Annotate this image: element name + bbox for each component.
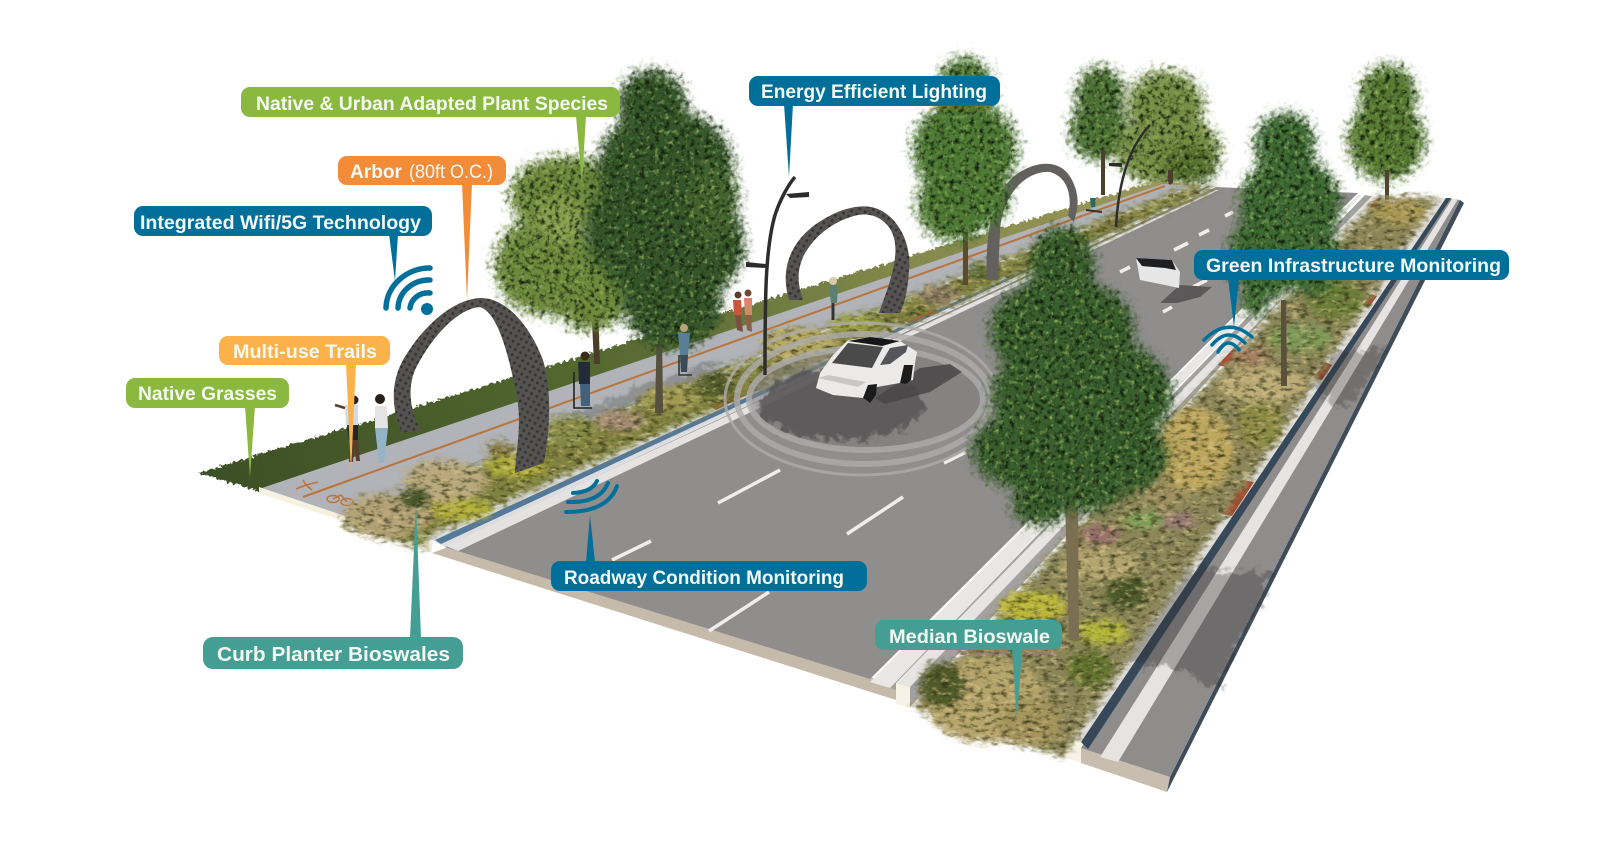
sensing rings — [725, 323, 999, 475]
median curb and stripe — [870, 195, 1381, 708]
callout: Curb Planter Bioswales — [203, 503, 463, 669]
far cyclist — [1086, 198, 1102, 212]
shaded pavement — [760, 370, 924, 440]
scooter rider near — [574, 352, 592, 408]
callout: Arbor — [338, 156, 506, 300]
callout: Green Infrastructure Monitoring — [1194, 250, 1509, 327]
lane dashes — [612, 212, 1233, 631]
callout: Roadway Condition Monitoring: Roadway Condition Monitoring — [564, 568, 844, 589]
callout: Native and Urban Adapted Plant Species: Native & Urban Adapted Plant Species — [256, 94, 608, 115]
mid trees — [913, 58, 1017, 285]
car shadow — [875, 364, 962, 404]
ornamental grasses — [920, 200, 1426, 746]
icon: integrated wifi — [386, 268, 433, 315]
pedestrian marking — [296, 480, 318, 490]
planter vegetation — [344, 214, 1131, 537]
left dark tree — [585, 70, 744, 413]
left olive tree — [495, 157, 632, 364]
right roadway — [1081, 198, 1464, 792]
icon: roadway sensor waves — [566, 481, 617, 512]
foreground median tree — [972, 227, 1172, 640]
callout: Roadway Condition Monitoring — [551, 515, 867, 591]
background tree shadows on trail — [560, 360, 720, 420]
callout: Energy Efficient Lighting — [749, 76, 1000, 177]
callout: Green Infrastructure Monitoring: Green Infrastructure Monitoring — [1206, 256, 1501, 277]
callout: Integrated Wifi/5G Technology: Integrated Wifi/5G Technology — [140, 213, 421, 234]
runners — [733, 290, 752, 332]
arbor: far — [987, 164, 1078, 280]
scooter rider far — [678, 324, 692, 375]
right median tree — [1228, 113, 1342, 386]
wheels — [863, 365, 913, 403]
roof — [848, 337, 900, 346]
cyclist — [829, 277, 838, 320]
tree shadow on right roadway — [1117, 567, 1273, 690]
main roadway base — [432, 547, 896, 700]
curb planter bioswale — [344, 186, 1219, 549]
road shoulder line — [446, 190, 1219, 551]
callout: Energy Efficient Lighting: Energy Efficient Lighting — [761, 82, 987, 103]
grass strip — [198, 182, 1185, 492]
arbor: middle — [786, 206, 909, 313]
far tree shadow on right roadway — [1307, 350, 1387, 408]
lamp post near — [746, 177, 809, 375]
callout: Multi-use Trails — [219, 336, 390, 473]
people on the trail — [335, 198, 1102, 463]
trail — [259, 184, 1192, 522]
bicycle marking — [327, 495, 353, 506]
windshield — [832, 343, 883, 368]
far trees — [1070, 65, 1424, 228]
callout: Integrated Wifi/5G Technology — [134, 206, 432, 281]
callout: Native Grasses — [126, 378, 289, 477]
icon: green infrastructure sensor waves — [1204, 327, 1252, 352]
car sensing zone — [725, 323, 999, 475]
callout: Native Grasses: Native Grasses — [138, 384, 277, 405]
car near — [816, 337, 917, 403]
side windows — [880, 345, 908, 365]
callout: Multi-use Trails: Multi-use Trails — [233, 342, 377, 363]
main road surface — [445, 187, 1358, 679]
outer curb — [1063, 198, 1451, 763]
walkers — [335, 394, 388, 463]
callout: Median Bioswale — [875, 620, 1062, 720]
bumper shade — [818, 375, 866, 387]
callout: Median Bioswale: Median Bioswale — [889, 627, 1050, 648]
lamp post far — [1109, 125, 1150, 227]
car far — [1136, 258, 1212, 303]
callout: Arbor: Arbor — [350, 162, 403, 183]
median bioswale planting — [912, 197, 1438, 757]
curb end — [423, 535, 432, 553]
arbor: near — [394, 298, 549, 473]
left curb — [423, 185, 1216, 547]
callout: Native and Urban Adapted Plant Species — [241, 87, 620, 183]
callout: Curb Planter Bioswales: Curb Planter Bioswales — [217, 644, 450, 666]
callout: Arbor: (80ft O.C.) — [409, 162, 493, 183]
